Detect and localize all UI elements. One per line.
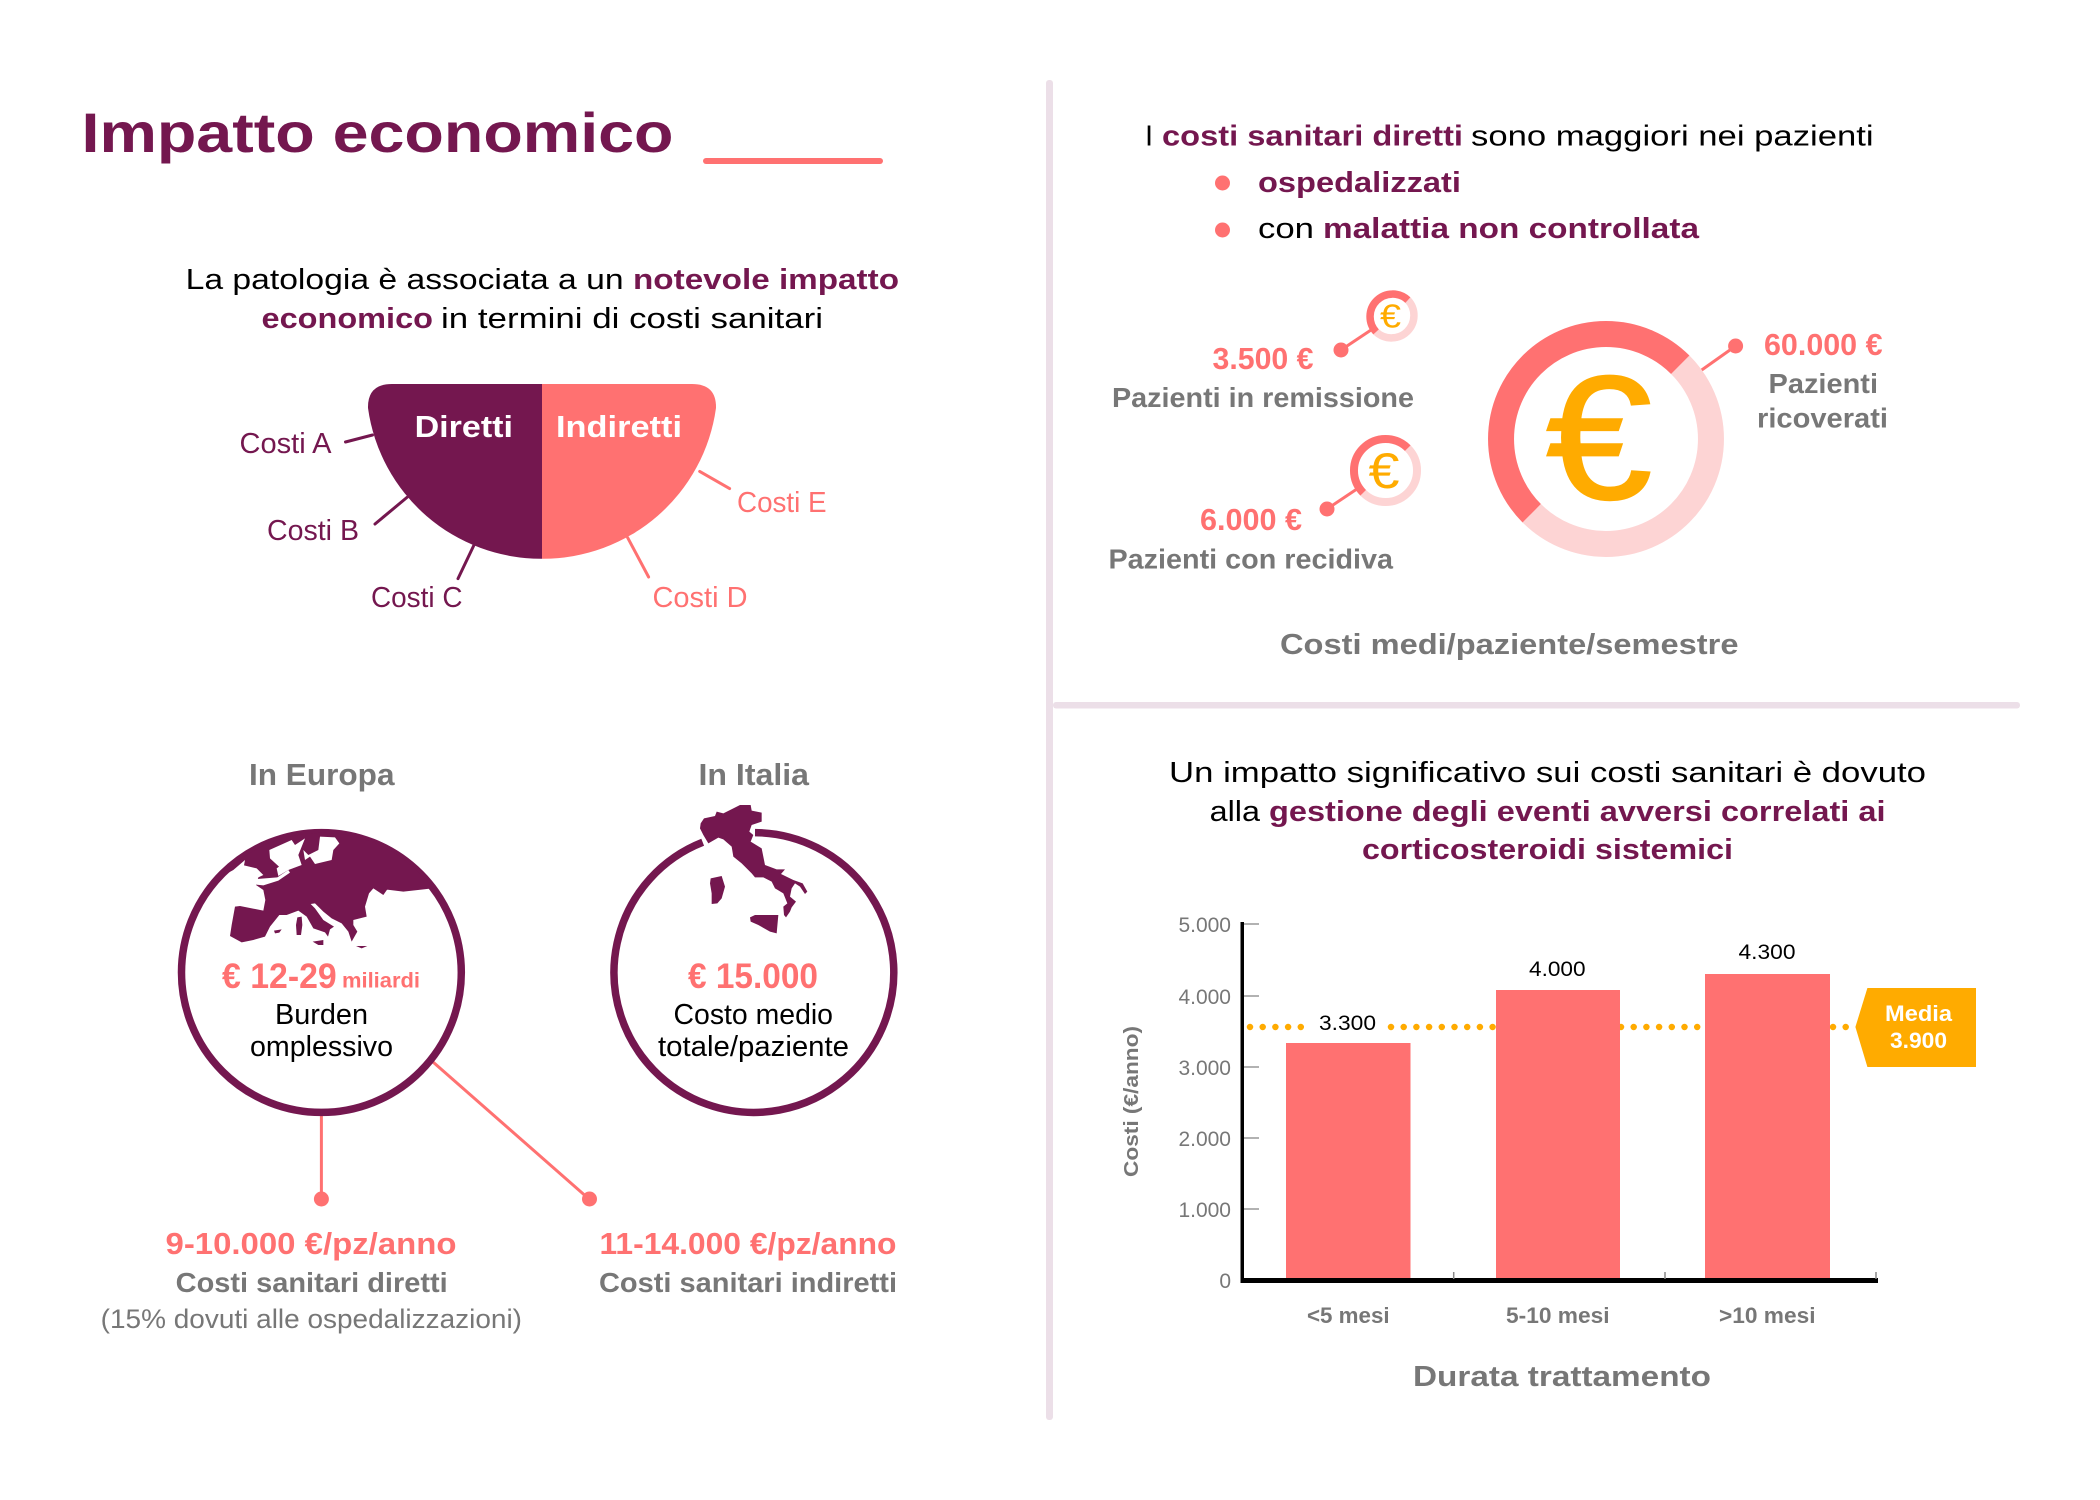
chart: direct and indirect costs half-pie [240,384,827,614]
bar value labels: 3.300 [1319,1012,1376,1035]
value: burden in Europe: miliardi [342,970,420,992]
x axis category labels: 5-10 mesi [1506,1303,1610,1328]
icon: large euro ring, hospitalised: € [1546,340,1652,536]
text block: indirect costs: 11-14.000 €/pz/anno [600,1226,896,1261]
icon: small euro ring, remission [1334,294,1414,358]
intro text block: La patologia è associata a un [186,264,624,296]
value: patients with relapse: 6.000 € [1200,502,1302,537]
intro text block: in termini di costi sanitari [441,303,823,335]
x axis category labels [1307,1303,1816,1328]
title: Impatto economico [82,101,674,164]
intro text block [186,264,899,335]
axes [1240,922,1878,1283]
value: burden in Europe: € 12-29 [222,957,337,996]
x axis category labels: <5 mesi [1307,1303,1390,1328]
value: burden in Europe: Burden [275,999,368,1031]
bars [1286,974,1830,1280]
title [82,101,883,164]
text block: hospitalised patients statement: con [1258,213,1314,245]
text block: hospitalised patients statement: I [1145,120,1153,152]
y axis ticks and labels: 2.000 [1178,1128,1231,1151]
chart: direct and indirect costs half-pie: Diretti [415,409,513,444]
y axis ticks and labels [1178,914,1259,1293]
value: cost in Italy [658,957,849,1063]
text block: adverse events statement: Un impatto significativo sui costi sanitari è dovuto [1169,757,1926,789]
y axis ticks and labels: 4.000 [1178,986,1231,1009]
value: hospitalised patients: 60.000 € [1764,327,1882,362]
y axis ticks and labels: 5.000 [1178,914,1231,937]
mean dotted line [1250,1024,1851,1030]
text block: indirect costs [599,1226,897,1298]
intro text block: economico [262,303,433,335]
value: burden in Europe [222,957,420,1063]
value: patients in remission [1112,341,1414,413]
text block: direct costs: (15% dovuti alle ospedalizzazioni) [101,1304,522,1334]
text block: hospitalised patients statement [1145,120,1874,245]
text block: adverse events statement: corticosteroidi sistemici [1362,834,1733,866]
value: patients with relapse [1108,502,1393,574]
text block: hospitalised patients statement: malattia non controllata [1323,213,1700,245]
text block: direct costs: 9-10.000 €/pz/anno [166,1226,456,1261]
value: burden in Europe: omplessivo [250,1031,393,1063]
text block: adverse events statement [1169,757,1926,866]
text block: hospitalised patients statement: costi sanitari diretti [1162,120,1463,152]
icon: small euro ring, remission: € [1380,298,1401,334]
value: patients in remission: Pazienti in remissione [1112,382,1414,413]
intro text block: notevole impatto [633,264,899,296]
value: hospitalised patients: ricoverati [1757,402,1888,434]
text block: hospitalised patients statement: ospedalizzati [1258,167,1461,199]
chart: direct and indirect costs half-pie: Costi B [267,515,359,547]
y axis ticks and labels: 1.000 [1178,1199,1231,1222]
text block: adverse events statement: alla [1210,796,1261,828]
chart: direct and indirect costs half-pie: Costi D [652,582,748,614]
icon: large euro ring, hospitalised [1501,334,1743,544]
icon: Europe map [220,833,432,948]
x axis title: Durata trattamento [1413,1361,1711,1393]
caption: average cost per patient per semester: Costi medi/paziente/semestre [1280,629,1738,661]
y axis ticks and labels: 3.000 [1178,1057,1231,1080]
x axis category labels: >10 mesi [1719,1303,1816,1328]
chart: direct and indirect costs half-pie: Costi A [240,428,332,460]
chart: direct and indirect costs half-pie: Indiretti [556,409,682,444]
y axis label: Costi (€/anno) [1121,1026,1143,1177]
mean badge: 3.900 [1890,1028,1947,1053]
bar value labels: 4.000 [1529,958,1586,981]
text block: adverse events statement: gestione degli eventi avversi correlati ai [1269,796,1886,828]
panel: Italy circle [614,805,894,1112]
text block: direct costs [101,1226,522,1334]
value: cost in Italy: € 15.000 [688,957,818,996]
value: hospitalised patients: Pazienti [1768,368,1878,399]
value: hospitalised patients [1757,327,1888,434]
bar value labels: 4.300 [1738,941,1796,964]
bar value labels [1319,941,1796,1035]
panel: Europe circle [182,833,461,1112]
connector lines from Europe circle [314,1062,597,1206]
value: cost in Italy: Costo medio [674,999,833,1031]
bar chart: cost by treatment duration [1121,914,1976,1393]
y axis ticks and labels: 0 [1219,1270,1231,1293]
heading: In Italia: In Italia [698,757,810,792]
chart: direct and indirect costs half-pie: Costi C [371,582,462,614]
text block: indirect costs: Costi sanitari indiretti [599,1267,897,1298]
text block: hospitalised patients statement: sono maggiori nei pazienti [1471,120,1874,152]
heading: In Europa: In Europa [249,757,395,792]
icon: Italy map [700,805,807,933]
icon: small euro ring, relapse [1320,439,1417,516]
icon: small euro ring, relapse: € [1368,443,1400,499]
chart: direct and indirect costs half-pie: Costi E [737,487,827,519]
value: cost in Italy: totale/paziente [658,1031,849,1063]
mean badge [1855,988,1976,1067]
text block: direct costs: Costi sanitari diretti [176,1267,448,1298]
value: patients with relapse: Pazienti con recidiva [1108,544,1393,574]
mean badge: Media [1885,1001,1953,1026]
value: patients in remission: 3.500 € [1212,341,1314,376]
